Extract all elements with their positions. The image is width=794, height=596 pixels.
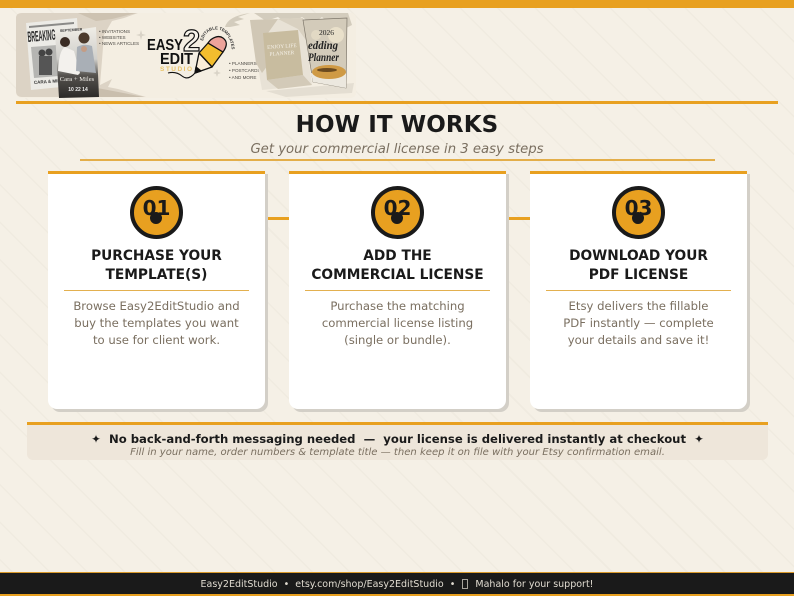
callout headline: ✦ No back-and-forth messaging needed — your license is delivered instantly at checkout ✦ [91,432,704,446]
bullet list right: • POSTCARDS [229,68,260,73]
footer text: Easy2EditStudio • etsy.com/shop/Easy2EditStudio • Mahalo for your support! [200,579,594,590]
step 3 text: Etsy delivers the fillable [569,299,708,313]
bullet list right: • PLANNERS [229,61,257,66]
step 1 text [73,299,240,347]
step 2 text [322,299,473,347]
sparkles [136,30,221,77]
icon: number badge 03: 03 [625,196,652,220]
banner divider [16,101,778,104]
step 3 text [563,299,714,347]
step 3 text: your details and save it! [568,333,709,347]
step 2 heading: ADD THE [363,248,432,264]
bullet list right [229,61,260,80]
planner: wedding book: edding [308,38,338,52]
bullet list left [99,29,139,46]
newspaper mockup: BREAKING [27,27,56,46]
callout: instant delivery [27,422,768,460]
bullet list left: • INVITATIONS [99,29,130,34]
icon: number badge 03 [612,186,665,239]
step 3 heading: PDF LICENSE [589,267,688,283]
panel: step 1 [48,171,265,409]
photo invitation mockup: Cara + Miles [60,76,95,83]
connector: step 2 to 3 [509,217,530,220]
planner: wedding book [303,18,347,88]
shadow smudge [266,83,354,97]
planner: floral book [250,18,312,90]
bullet list left: • NEWS ARTICLES [99,41,139,46]
planner: floral book: PLANNER [269,50,295,58]
title: HOW IT WORKS [296,112,498,138]
logo: Easy 2 Edit Studio: STUDIO [160,66,192,73]
bullet list right: • AND MORE [229,75,256,80]
icon: number badge 02 [371,186,424,239]
step 1 text: Browse Easy2EditStudio and [73,299,240,313]
step 2 heading [311,248,484,283]
curved label: EDITABLE TEMPLATES [200,26,235,50]
leaf shapes [225,13,352,29]
subtitle: Get your commercial license in 3 easy steps [250,142,544,157]
subtitle rule [80,159,715,161]
bullet list left: • WEBSITES [99,35,126,40]
pencil [195,37,226,73]
icon: number badge 01: 01 [143,196,170,220]
step 3 heading [569,248,708,283]
photo invitation mockup: SEPTEMBER [60,27,83,33]
photo invitation mockup [55,27,99,98]
step 1 heading [91,248,222,283]
torn paper shape left [16,13,146,97]
step 2 text: (single or bundle). [344,333,451,347]
logo: Easy 2 Edit Studio: EDIT [160,51,193,68]
planner: floral book: ENJOY LIFE [267,43,298,51]
banner background [16,13,356,98]
step 1 text: to use for client work. [93,333,220,347]
connector: step 1 to 2 [268,217,289,220]
icon: number badge 02: 02 [384,196,411,220]
step 2 text: commercial license listing [322,316,473,330]
panel: step 2 [289,171,506,409]
step 2 heading: COMMERCIAL LICENSE [311,267,484,283]
planner: wedding book: Planner [308,50,339,64]
step 1 heading: PURCHASE YOUR [91,248,222,264]
logo: Easy 2 Edit Studio [147,23,235,78]
top accent bar [0,0,794,8]
banner: Easy2Edit Studio product collage [16,13,354,98]
newspaper mockup [26,18,81,90]
step 1 heading: TEMPLATE(S) [106,267,207,283]
newspaper mockup: CARA & MILES [34,78,66,85]
step 3 heading: DOWNLOAD YOUR [569,248,708,264]
step 3 text: PDF instantly — complete [563,316,714,330]
logo: Easy 2 Edit Studio: EASY [147,37,184,54]
callout note: Fill in your name, order numbers & template title — then keep it on file with your Etsy confirmation email. [130,447,665,458]
planner: wedding book: 2026 [319,28,334,37]
panel: step 3 [530,171,747,409]
photo invitation mockup: 10 22 14 [68,87,88,93]
step 1 text: buy the templates you want [74,316,239,330]
icon: number badge 01 [130,186,183,239]
footer bar [0,572,794,596]
step 2 text: Purchase the matching [330,299,465,313]
logo: Easy 2 Edit Studio: 2 [183,23,200,58]
